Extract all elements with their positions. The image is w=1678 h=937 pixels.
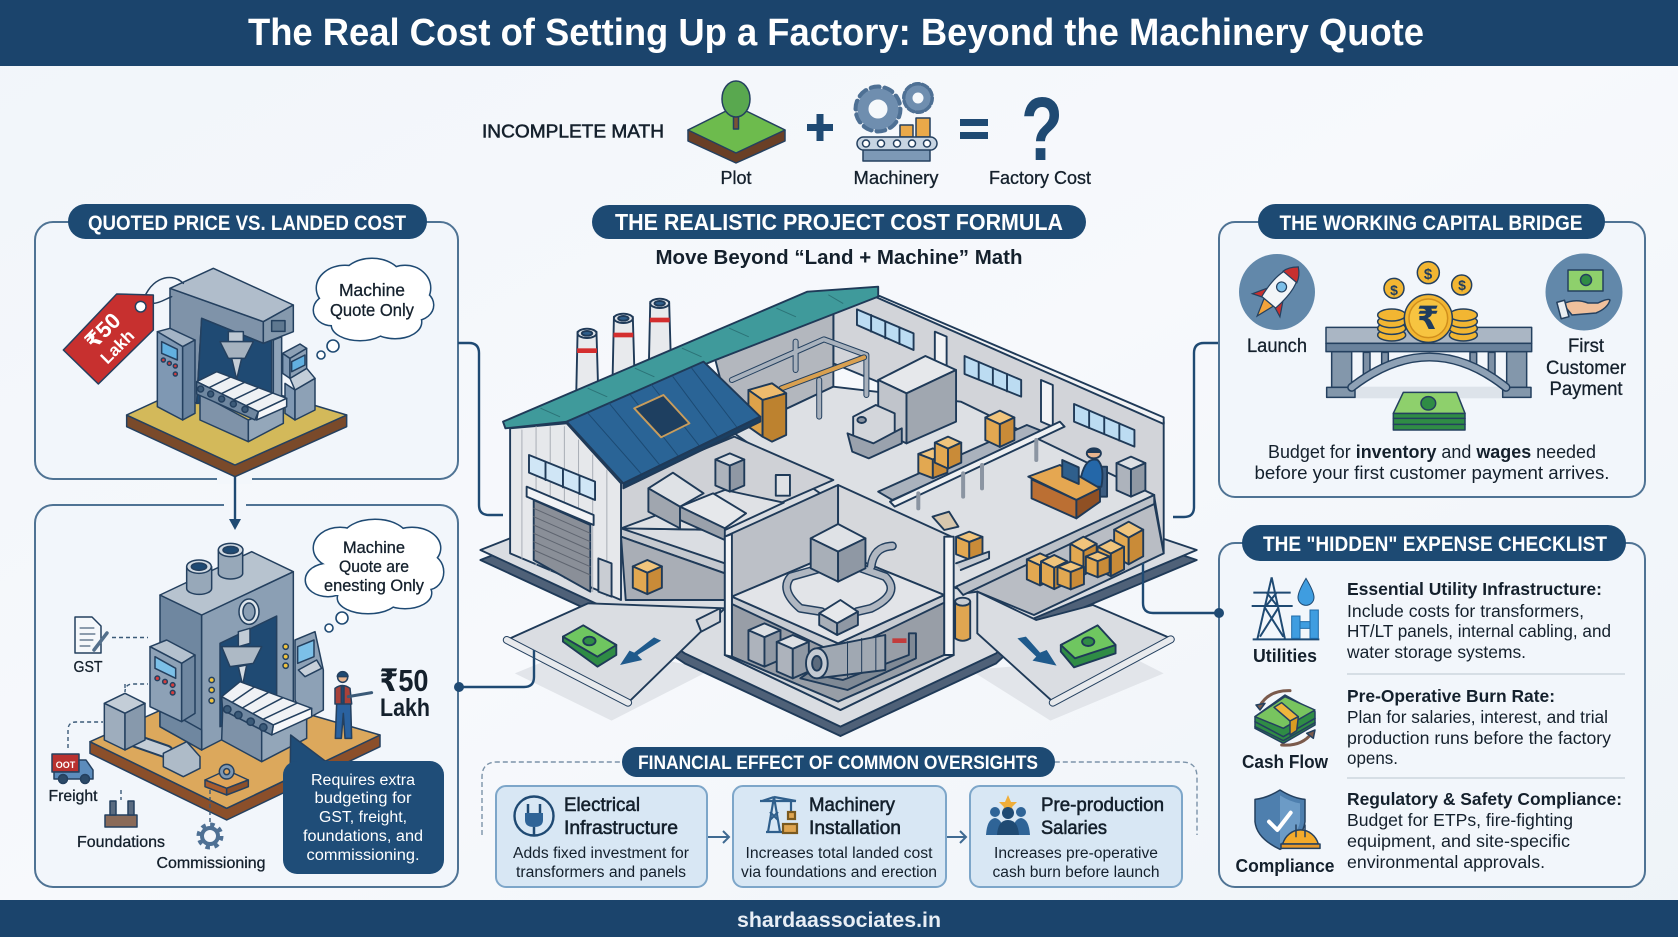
card: electrical infrastructure: transformers and panels <box>516 864 686 881</box>
arrow: cash out right <box>1017 637 1057 666</box>
formula heading <box>592 205 1086 269</box>
central cutaway room <box>725 485 954 710</box>
price tag text: ₹50 <box>80 308 126 354</box>
panel: hidden expense checklist <box>1219 525 1645 887</box>
working capital note: before your first customer payment arrives. <box>1254 463 1610 483</box>
panel heading pill: QUOTED PRICE VS. LANDED COST <box>88 212 406 235</box>
checklist item: burn rate: Pre-Operative Burn Rate: <box>1347 686 1555 706</box>
arrow: electrical to machinery <box>708 831 729 843</box>
checklist item: utility infrastructure: water storage systems. <box>1346 642 1526 662</box>
callout: extra budgeting: foundations, and <box>303 828 423 845</box>
question mark: ? <box>1021 80 1063 180</box>
checklist item: utility infrastructure: HT/LT panels, internal cabling, and <box>1347 621 1611 641</box>
office desk and worker <box>1028 448 1145 518</box>
label: foundations: Foundations <box>77 834 165 851</box>
label: launch: Launch <box>1247 336 1307 357</box>
label: first customer payment: Customer <box>1546 358 1627 379</box>
coin symbols: $ <box>1458 277 1466 293</box>
price label: ₹50 <box>380 663 428 698</box>
icon: crane <box>760 797 797 833</box>
working capital note <box>1254 442 1610 483</box>
checklist item: burn rate: production runs before the factory <box>1347 728 1611 748</box>
panel: working capital bridge <box>1219 204 1645 497</box>
panel heading pill <box>68 204 427 239</box>
callout: extra budgeting: Requires extra <box>311 772 415 789</box>
panel: quoted price <box>35 204 458 484</box>
checklist item: regulatory: environmental approvals. <box>1347 852 1545 872</box>
callout: extra budgeting: commissioning. <box>306 847 420 864</box>
label: first customer payment <box>1546 336 1627 400</box>
icon: team with star <box>986 795 1030 835</box>
thought bubble: machine quote only: Machine <box>339 280 405 300</box>
checklist item: regulatory: equipment, and site-specific <box>1347 831 1570 851</box>
icon: commissioning gear <box>198 824 222 848</box>
icon: freight truck: OOT <box>56 760 76 770</box>
card: electrical infrastructure <box>496 786 707 887</box>
card: machinery installation: via foundations and erection <box>741 864 937 881</box>
heading: THE "HIDDEN" EXPENSE CHECKLIST <box>1263 533 1607 556</box>
price tag text: Lakh <box>97 326 138 368</box>
illustration: machine on plinth <box>63 268 347 477</box>
card: machinery installation: Machinery <box>809 795 895 816</box>
roof <box>503 287 878 488</box>
panel: financial effect of oversights <box>482 747 1197 887</box>
base slab <box>480 480 1197 736</box>
checklist item: utility infrastructure: Essential Utility Infrastructure: <box>1347 579 1602 599</box>
label: compliance: Compliance <box>1236 856 1334 876</box>
icon: cash flow <box>1255 691 1315 745</box>
label: first customer payment: Payment <box>1550 379 1623 400</box>
main machine <box>848 356 956 458</box>
card: machinery installation: Increases total landed cost <box>746 845 933 862</box>
icon: freight truck <box>52 754 93 784</box>
checklist item: utility infrastructure <box>1346 579 1611 662</box>
cash stack under bridge <box>1393 392 1465 430</box>
checklist item: burn rate: Plan for salaries, interest, and trial <box>1347 707 1608 727</box>
stored cartons <box>1027 522 1143 589</box>
price label: Lakh <box>380 694 430 722</box>
icon: plug <box>514 796 554 836</box>
heading: FINANCIAL EFFECT OF COMMON OVERSIGHTS <box>638 753 1038 774</box>
thought bubble: hidden quote: enesting Only <box>324 577 425 595</box>
lower plant equipment <box>748 623 916 690</box>
icon: cash stack right <box>1061 625 1116 667</box>
callout: extra budgeting <box>283 761 444 874</box>
illustration: bridge with coins <box>1326 262 1532 430</box>
chimneys <box>576 299 671 400</box>
icon: launch rocket <box>1239 254 1315 330</box>
label: cash flow: Cash Flow <box>1242 752 1329 772</box>
card: machinery installation <box>733 786 946 887</box>
coins <box>1378 262 1477 342</box>
incomplete math equation <box>482 80 1091 188</box>
footer website: shardaassociates.in <box>737 909 941 932</box>
equals sign <box>960 119 988 139</box>
icon: GST document <box>75 617 107 653</box>
icon: compliance shield and hard hat <box>1255 790 1320 849</box>
equation captions: Factory Cost <box>989 168 1091 188</box>
connector lines <box>454 343 1224 692</box>
card: electrical infrastructure: Infrastructure <box>564 818 678 839</box>
thought bubble: machine quote only: Quote Only <box>330 300 414 320</box>
icon: utilities tower and water <box>1252 577 1319 639</box>
callout: extra budgeting: GST, freight, <box>319 809 407 826</box>
card: pre-production salaries: cash burn before launch <box>992 864 1160 881</box>
arrow: cash out left <box>620 637 661 665</box>
gable building <box>510 423 833 600</box>
title: The Real Cost of Setting Up a Factory: Beyond the Machinery Quote <box>248 12 1424 54</box>
arrow: machinery to salaries <box>947 831 966 843</box>
price tag text <box>79 308 139 368</box>
heading: THE WORKING CAPITAL BRIDGE <box>1280 212 1582 235</box>
equation label: INCOMPLETE MATH <box>482 120 664 142</box>
label: first customer payment: First <box>1568 336 1605 357</box>
label: utilities: Utilities <box>1253 646 1317 666</box>
label: GST: GST <box>74 659 103 676</box>
card: pre-production salaries: Pre-production <box>1041 795 1164 816</box>
icon: foundations <box>105 801 137 827</box>
working capital note: Budget for inventory and wages needed <box>1268 442 1596 462</box>
panel: landed cost <box>35 477 458 887</box>
technician <box>335 672 372 738</box>
wall windows <box>857 309 1134 447</box>
card: electrical infrastructure: Adds fixed investment for <box>513 845 689 862</box>
orange cabinet <box>748 383 786 442</box>
header banner <box>0 0 1678 66</box>
card: pre-production salaries <box>970 786 1182 887</box>
icon: cash stack left <box>563 625 616 667</box>
icon: machinery gears and conveyor <box>856 84 937 161</box>
card: pre-production salaries: Increases pre-operative <box>994 845 1158 862</box>
label: freight: Freight <box>48 788 98 805</box>
overhead pipes <box>732 339 866 417</box>
equation captions: Plot <box>720 168 752 188</box>
checklist item: regulatory <box>1347 789 1622 872</box>
illustration: machine with extras <box>90 543 380 820</box>
label: commissioning: Commissioning <box>156 855 266 872</box>
price label <box>380 663 430 722</box>
illustration: isometric factory cutaway <box>480 287 1197 736</box>
checklist item: regulatory: Budget for ETPs, fire-fighting <box>1347 810 1573 830</box>
formula subtitle: Move Beyond “Land + Machine” Math <box>656 246 1022 269</box>
ramp shadows <box>515 643 1164 721</box>
coin symbols <box>1390 266 1466 336</box>
icon: plot of land <box>688 81 785 163</box>
coin symbols: $ <box>1390 282 1398 298</box>
plus sign <box>807 114 833 141</box>
checklist item: burn rate: opens. <box>1347 748 1398 768</box>
icon: price tag <box>63 277 183 384</box>
coin symbols: $ <box>1424 266 1433 283</box>
coin symbols: ₹ <box>1417 300 1439 336</box>
thought bubble: machine quote only <box>314 259 433 359</box>
checklist item: utility infrastructure: Include costs for transformers, <box>1347 601 1584 621</box>
ramps with cash <box>507 592 1171 703</box>
heading <box>622 747 1055 777</box>
equation captions <box>720 168 1091 188</box>
piping loop unit <box>697 524 970 641</box>
arrow: quote to landed cost <box>229 477 241 530</box>
footer banner <box>0 900 1678 937</box>
extras dotted leaders <box>68 638 210 823</box>
thought bubble: hidden quote <box>306 520 443 632</box>
card: electrical infrastructure: Electrical <box>564 795 640 816</box>
formula heading: THE REALISTIC PROJECT COST FORMULA <box>615 209 1063 235</box>
heading <box>1242 525 1626 561</box>
equation captions: Machinery <box>854 168 938 188</box>
thought bubble: hidden quote: Machine <box>343 539 405 557</box>
heading <box>1258 204 1605 239</box>
conveyor line <box>878 411 1065 508</box>
goods on trolley <box>932 512 989 570</box>
icon: hand receiving cash <box>1546 254 1622 330</box>
checklist item: regulatory: Regulatory & Safety Compliance: <box>1347 789 1622 809</box>
card: machinery installation: Installation <box>809 818 901 839</box>
callout: extra budgeting: budgeting for <box>314 790 412 807</box>
thought bubble: hidden quote: Quote are <box>339 558 409 576</box>
checklist item: burn rate <box>1347 686 1611 768</box>
back walls and main floor <box>715 296 1164 615</box>
card: pre-production salaries: Salaries <box>1041 818 1107 839</box>
